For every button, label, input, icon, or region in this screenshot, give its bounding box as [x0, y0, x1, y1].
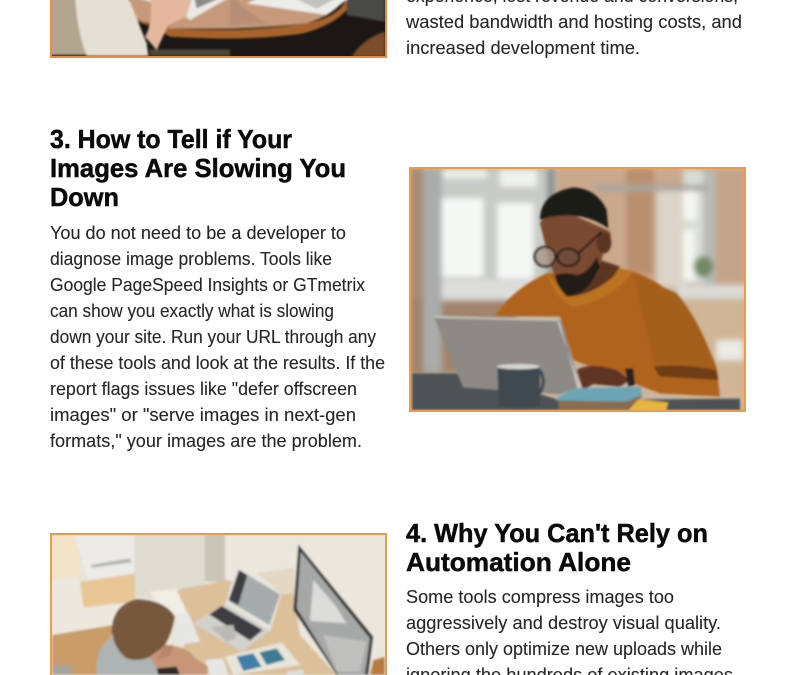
body text: section 3: You do not need to be a developer to: [50, 223, 346, 243]
desk: [173, 580, 337, 675]
body text: section 3: diagnose image problems. Tools like: [50, 249, 332, 269]
heading: section 4: Automation Alone: [406, 547, 631, 577]
mug: [497, 367, 540, 408]
body text: section 3: formats," your images are the problem.: [50, 431, 362, 451]
neck and head: [563, 260, 620, 297]
body text: end of section 2: increased development time.: [406, 38, 640, 58]
heading: section 3: 3. How to Tell if Your: [50, 124, 292, 154]
keyboard: [177, 612, 200, 645]
image: hands on laptops at round wooden table: [50, 0, 387, 57]
body text: section 3: images" or "serve images in next-gen: [50, 405, 356, 425]
body text: section 3: down your site. Run your URL through any: [50, 327, 376, 347]
body text: section 4: [406, 587, 733, 675]
laptop: [224, 580, 282, 632]
body text: end of section 2: wasted bandwidth and hosting costs, and: [405, 12, 742, 32]
heading: section 3: Down: [50, 182, 119, 212]
image: man with glasses working on laptop: [409, 167, 747, 412]
man: [97, 637, 160, 675]
table: [412, 373, 740, 410]
body text: section 4: aggressively and destroy visual quality.: [406, 613, 721, 633]
body text: section 3: report flags issues like "defer offscreen: [50, 379, 357, 399]
body text: section 4: Others only optimize new uploads while: [406, 639, 722, 659]
hand: [577, 366, 630, 390]
heading: section 4: 4. Why You Can't Rely on: [406, 518, 708, 548]
glasses: [535, 232, 602, 266]
heading: section 3: Images Are Slowing You: [50, 153, 346, 183]
body text: section 3: can show you exactly what is slowing: [50, 301, 334, 321]
sweater: [495, 267, 720, 397]
body text: end of section 2: [405, 0, 742, 58]
image: man at desk with laptop and monitor: [50, 533, 387, 675]
body text: section 4: Some tools compress images too: [406, 587, 674, 607]
laptop: [433, 316, 580, 394]
body text: section 3: of these tools and look at the results. If the: [50, 353, 385, 373]
photo book: [225, 642, 301, 675]
heading: section 3: [50, 124, 346, 212]
monitor: [293, 544, 373, 675]
notebooks: [628, 399, 668, 410]
heading: section 4: [406, 518, 708, 577]
body text: section 3: Google PageSpeed Insights or GTmetrix: [50, 275, 365, 295]
body text: section 3: [50, 223, 385, 451]
